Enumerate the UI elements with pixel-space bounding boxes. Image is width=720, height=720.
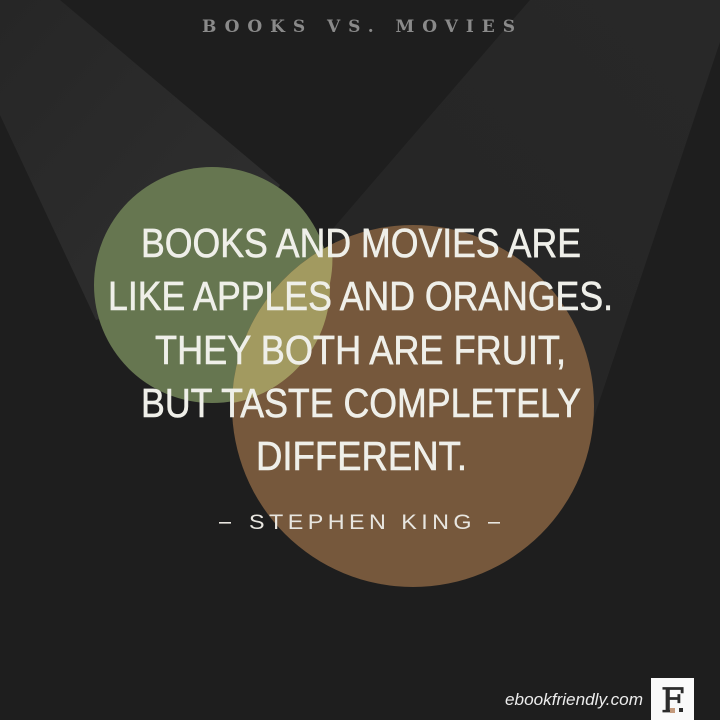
logo: [651, 678, 694, 720]
attribution: STEPHEN KING: [249, 511, 476, 534]
left spotlight beam: [0, 0, 280, 320]
header: books vs. movies: BOOKS VS. MOVIES: [202, 17, 515, 37]
quote: DIFFERENT.: [256, 433, 467, 479]
quote: THEY BOTH ARE FRUIT,: [155, 327, 566, 373]
quote: LIKE APPLES AND ORANGES.: [108, 273, 613, 319]
quote: BUT TASTE COMPLETELY: [141, 380, 581, 426]
logo: F: [661, 681, 685, 720]
green circle: [94, 167, 330, 403]
circle overlap: [232, 244, 332, 403]
quote: BOOKS AND MOVIES ARE: [141, 220, 581, 266]
site url: ebookfriendly.com: [505, 690, 643, 709]
right spotlight beam: [330, 0, 720, 420]
quote: [108, 220, 613, 479]
brown circle: [232, 225, 594, 587]
